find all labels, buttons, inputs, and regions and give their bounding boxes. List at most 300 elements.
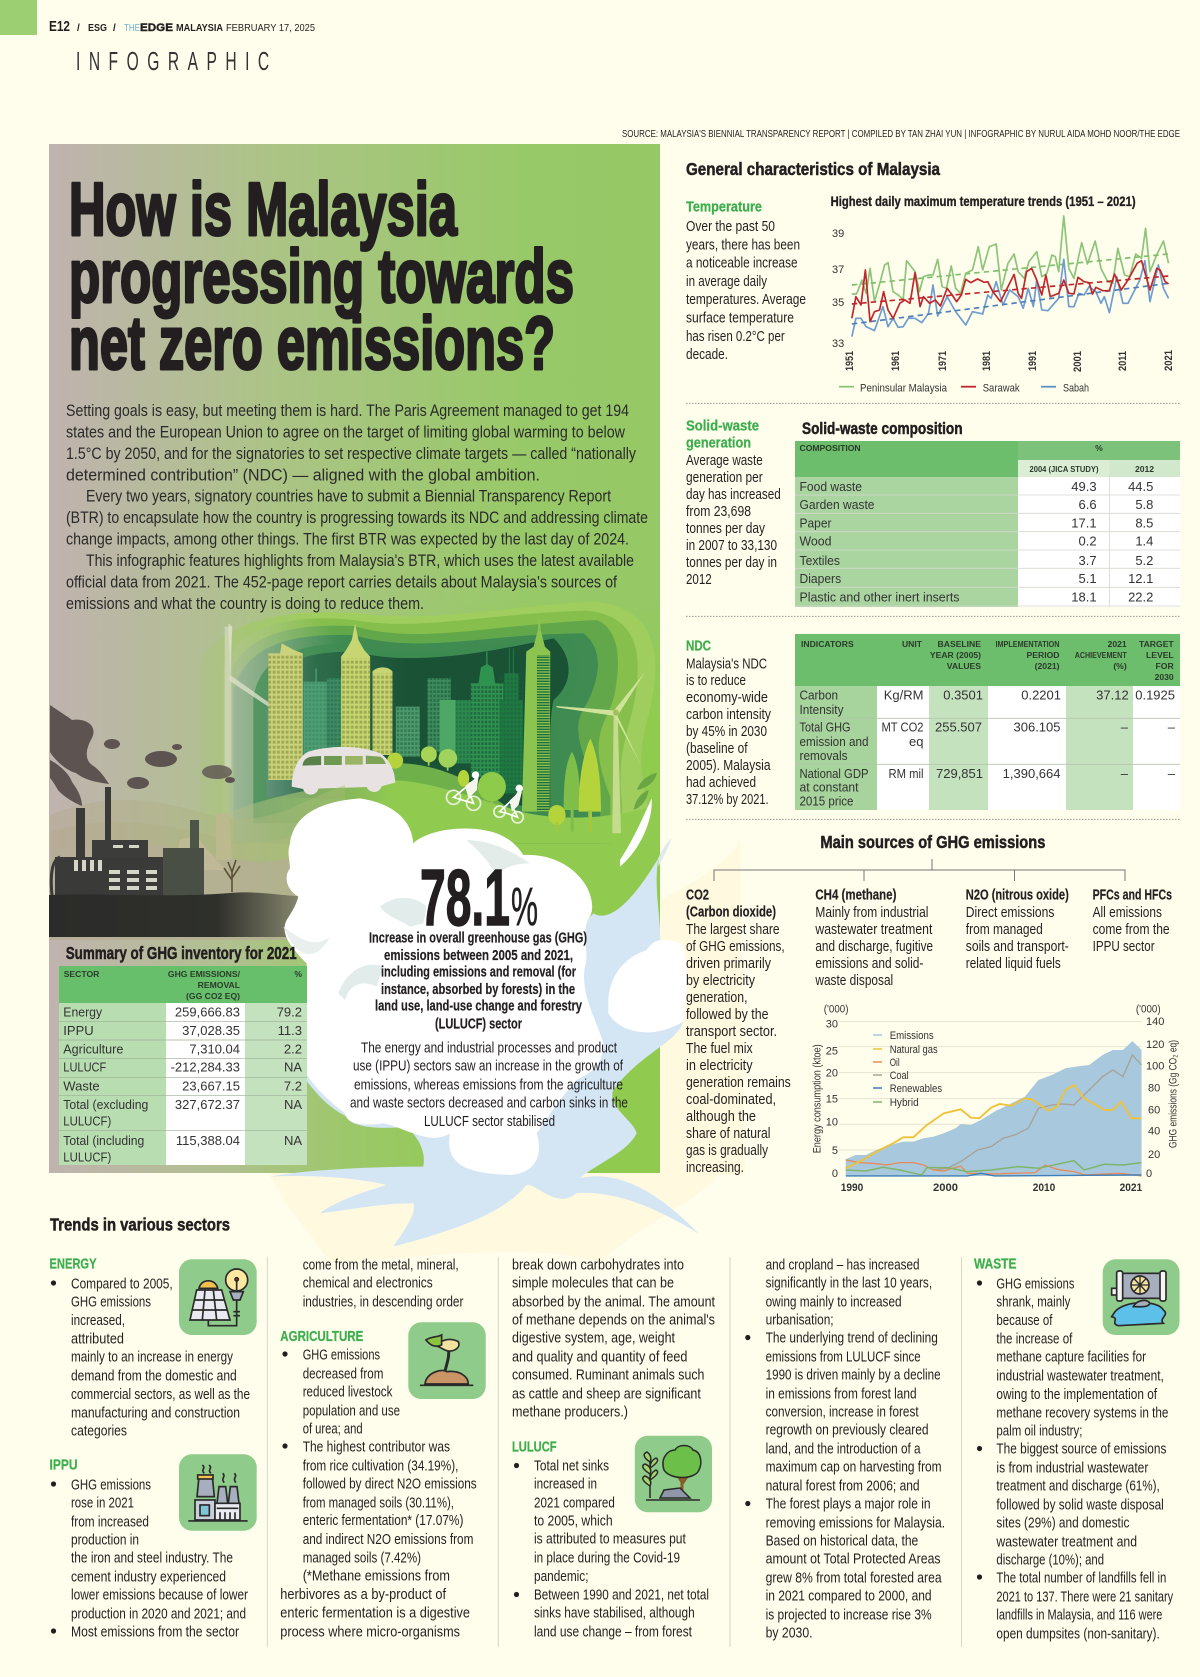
panel: main sources of GHG emissions [686,832,1179,1194]
table: summary of GHG inventory: NA [284,1133,302,1148]
chart legend: Emissions [890,1030,934,1042]
column 4 continuation text: grew 8% from total forested area [766,1570,942,1586]
intro text: Every two years, signatory countries have to submit a Biennial Transparency Report [86,487,611,506]
table: summary of GHG inventory: Total (including [63,1133,144,1148]
trees [387,738,601,833]
table: solid-waste composition: 2012 [1135,464,1154,474]
intro text: change impacts, among other things. The first BTR was expected by the last day of 2024. [66,530,629,549]
temperature text: temperatures. Average [686,292,806,308]
agriculture section: reduced livestock [303,1385,393,1401]
CH4 text: Mainly from industrial [815,905,928,921]
CO2 text: generation, [686,990,748,1006]
page number and masthead: E12 [49,19,70,35]
solid-waste text: Average waste [686,453,763,469]
bold description [369,931,587,1032]
ground hills [392,763,508,808]
table: NDC indicators [795,634,1180,810]
table: summary of GHG inventory: LULUCF [63,1060,106,1075]
green corner tab [0,0,37,35]
chart: energy consumption and emissions: ('000) [1136,1004,1161,1016]
energy section: demand from the domestic and [71,1368,237,1384]
bold description: (LULUCF) sector [435,1016,522,1032]
table: NDC indicators: Kg/RM [884,687,924,702]
PFCs and HFCs text [1093,887,1172,955]
chart legend: Coal [890,1070,909,1082]
table: NDC indicators: 2030 [1155,672,1174,682]
table: summary of GHG inventory: GHG EMISSIONS/ [168,969,241,979]
CO2 text: of GHG emissions, [686,939,785,955]
table: solid-waste composition: % [1095,443,1103,453]
IPPU section: production in [71,1533,139,1549]
N2O text: Direct emissions [966,905,1054,921]
section label: INFOGRAPHIC [76,47,269,76]
background buildings [303,648,523,793]
waste section: industrial wastewater treatment, [996,1368,1164,1384]
table: summary of GHG inventory: -212,284.33 [171,1060,240,1075]
IPPU section: IPPU [50,1458,78,1474]
LULUCF section: LULUCF [512,1439,557,1455]
NDC text: had achieved [686,775,756,791]
factory silhouette [51,787,240,897]
temperature text: a noticeable increase [686,256,798,272]
column 4 continuation text: in 2021 compared to 2000, and [766,1588,932,1604]
table: NDC indicators: IMPLEMENTATION [996,639,1060,649]
column 3 continuation text: absorbed by the animal. The amount [512,1294,715,1310]
column 4 continuation text: amount ot Total Protected Areas [766,1552,941,1568]
chart legend: Sabah [1063,383,1089,395]
bus [292,747,395,795]
chart legend: Oil [890,1057,900,1069]
solid-waste text: tonnes per day in [686,555,777,571]
table: summary of GHG inventory: IPPU [63,1023,94,1038]
waste section: WASTE [974,1256,1017,1272]
table: NDC indicators: 729,851 [936,766,983,781]
column 4 continuation text: significantly in the last 10 years, [766,1276,932,1292]
energy section: manufacturing and construction [71,1405,240,1421]
regular description: and waste sectors decreased and carbon sinks in the [350,1096,628,1112]
table: solid-waste composition [795,420,1180,607]
column 2 continuation text: come from the metal, mineral, [303,1258,459,1274]
tall light-green tower [522,618,550,812]
column 3 continuation text: methane producers.) [512,1404,628,1420]
chart: energy consumption and emissions: 10 [826,1117,838,1129]
connector tree [714,859,1125,881]
table: NDC indicators: 0.1925 [1135,687,1175,702]
callout: 78.1% statistic [350,853,628,1130]
column 4 continuation text: land, and the introduction of a [766,1441,921,1457]
table: summary of GHG inventory: 23,667.15 [182,1079,240,1094]
column 4 continuation text: removing emissions for Malaysia. [766,1516,945,1532]
agriculture section: herbivores as a by-product of [280,1587,447,1603]
paint splash: blue behind cloud [270,838,698,1247]
table: NDC indicators: – [1121,766,1129,781]
temperature text: years, there has been [686,238,800,254]
table: NDC indicators: VALUES [947,661,981,671]
line chart: temperature trends: 2011 [1117,351,1129,371]
right wind turbine [556,672,645,833]
solid-waste text: in 2007 to 33,130 [686,538,777,554]
CH4 text: CH4 (methane) [815,887,897,903]
chart legend [839,383,1089,395]
intro text: This infographic features highlights from Malaysia's BTR, which uses the latest available [86,551,634,570]
table: solid-waste composition: 6.6 [1079,497,1097,512]
table: summary of GHG inventory [59,943,307,1165]
panel: trends in various sectors [50,1215,1180,1647]
NDC text: NDC [686,639,711,655]
table: summary of GHG inventory: Total (excluding [63,1097,148,1112]
agriculture section: managed soils (7.42%) [303,1550,421,1566]
table: NDC indicators: 2021 [1108,639,1127,649]
illustration: green city and factory [49,602,664,940]
table: solid-waste composition: Diapers [800,571,842,586]
temperature text: in average daily [686,274,768,290]
agriculture section: enteric fermentation is a digestive [280,1606,470,1622]
column 3 continuation text: and quality and quantity of feed [512,1350,687,1366]
table: NDC indicators: TARGET [1139,639,1174,649]
column 4 continuation text: The underlying trend of declining [766,1331,938,1347]
title: net zero emissions? [69,301,555,385]
intro text: 1.5°C by 2050, and for the signatories to set respective climate targets — called “nationally [66,444,637,463]
waste section: open dumpsites (non-sanitary). [996,1626,1160,1642]
NDC text: by 45% in 2030 [686,724,767,740]
table: summary of GHG inventory: (GG CO2 EQ) [186,991,240,1001]
table: solid-waste composition: 8.5 [1135,516,1153,531]
chart: energy consumption and emissions: 2000 [933,1182,958,1194]
agriculture section: The highest contributor was [303,1440,450,1456]
paper-cut green layers [200,602,664,843]
column 4 continuation text: The forest plays a major role in [766,1497,931,1513]
page number and masthead: EDGE [140,22,173,34]
LULUCF section: to 2005, which [534,1514,613,1530]
table: solid-waste composition: 49.3 [1071,479,1097,494]
solid-waste text: from 23,698 [686,504,751,520]
column 2 continuation text: industries, in descending order [303,1294,464,1310]
CH4 text: and discharge, fugitive [815,939,933,955]
table: summary of GHG inventory: NA [284,1097,302,1112]
waste section: GHG emissions [996,1276,1074,1292]
table: summary of GHG inventory: 7.2 [284,1079,302,1094]
waste section: because of [996,1313,1053,1329]
chart: energy consumption and emissions: GHG emissions (Gg CO₂ eq) [1167,1040,1179,1148]
bold description: including emissions and removal (for [381,965,576,981]
chart legend: Hybrid [890,1097,919,1109]
line chart: temperature trends: Highest daily maximum temperature trends (1951 – 2021) [831,193,1136,209]
agriculture section: population and use [303,1404,400,1420]
LULUCF section: increased in [534,1477,597,1493]
table: NDC indicators: emission and [800,734,868,749]
solid-waste text: 2012 [686,572,712,588]
chart legend: Sarawak [983,383,1020,395]
agriculture section: of urea; and [303,1422,363,1438]
IPPU section: cement industry experienced [71,1569,226,1585]
CO2 text: increasing. [686,1160,744,1176]
chart legend: Peninsular Malaysia [860,383,948,395]
table: solid-waste composition: Garden waste [800,497,874,512]
intro text: determined contribution” (NDC) — aligned with the global ambition. [66,465,540,484]
column 4 continuation text [745,1258,945,1642]
line chart: temperature trends: 39 [832,228,844,240]
line chart: temperature trends: 2001 [1072,351,1084,372]
line chart: temperature trends [831,193,1175,395]
CO2 text [686,887,791,1176]
chart legend [873,1030,943,1109]
table: summary of GHG inventory: 7,310.04 [189,1041,240,1056]
agriculture section: from rice cultivation (34.19%), [303,1458,458,1474]
table: summary of GHG inventory: SECTOR [64,969,100,979]
icon: wastewater pipe [1103,1259,1180,1335]
table: NDC indicators: 1,390,664 [1003,766,1060,781]
page number and masthead: THE [124,22,140,34]
agriculture section: enteric fermentation* (17.07%) [303,1513,463,1529]
intro text: Setting goals is easy, but meeting them is hard. The Paris Agreement managed to get 194 [66,401,629,420]
dark ground [49,892,298,937]
regular description [350,1040,628,1130]
waste section: the increase of [996,1331,1073,1347]
table: NDC indicators: 255.507 [935,720,982,735]
line chart: temperature trends: 35 [832,297,844,309]
bold description: Increase in overall greenhouse gas (GHG) [369,931,587,947]
chart: energy consumption and emissions: 40 [1148,1126,1160,1138]
icon: factory [179,1454,257,1531]
table: solid-waste composition: Textiles [800,553,840,568]
waste section: palm oil industry; [996,1424,1082,1440]
chart legend: Natural gas [890,1044,938,1056]
chart: energy consumption and emissions: 60 [1148,1104,1160,1116]
header strip [0,0,315,76]
IPPU section: rose in 2021 [71,1495,134,1511]
table: NDC indicators: ACHIEVEMENT [1075,650,1127,660]
NDC text: carbon intensity [686,707,772,723]
solid-waste text: generation per [686,470,763,486]
table: summary of GHG inventory: Agriculture [63,1041,123,1056]
table: NDC indicators: UNIT [902,639,923,649]
table: solid-waste composition: COMPOSITION [800,443,861,453]
table: NDC indicators: – [1168,766,1176,781]
CO2 text: CO2 [686,887,709,903]
line chart: temperature trends: 1951 [844,351,856,371]
table: summary of GHG inventory: 2.2 [284,1041,302,1056]
table: summary of GHG inventory: Waste [63,1079,100,1094]
CH4 text: emissions and solid- [815,956,924,972]
waste section: methane capture facilities for [996,1350,1146,1366]
column 4 continuation text: by 2030. [766,1626,813,1642]
column 3 continuation text: consumed. Ruminant animals such [512,1368,704,1384]
table: summary of GHG inventory: LULUCF) [63,1150,111,1165]
IPPU section: the iron and steel industry. The [71,1550,233,1566]
chart: energy consumption and emissions: ('000) [824,1004,848,1016]
polluted wavy layers [50,785,350,940]
CH4 text [815,887,933,989]
table: NDC indicators: FOR [1156,661,1174,671]
PFCs and HFCs text: IPPU sector [1093,939,1155,955]
table: solid-waste composition: 1.4 [1135,534,1153,549]
table: NDC indicators: PERIOD [1027,650,1060,660]
agriculture section: (*Methane emissions from [303,1569,450,1585]
PFCs and HFCs text: All emissions [1093,905,1162,921]
line chart: temperature trends: 1971 [937,351,949,371]
CO2 text: gas is gradually [686,1143,769,1159]
left turbine [225,623,270,773]
chart: energy consumption and emissions: 2021 [1120,1182,1142,1194]
regular description: The energy and industrial processes and product [361,1040,617,1056]
table: NDC indicators: – [1168,720,1176,735]
CO2 text: transport sector. [686,1024,777,1040]
table: NDC indicators: RM mil [888,766,924,781]
column 3 continuation text: digestive system, age, weight [512,1331,675,1347]
IPPU section: GHG emissions [71,1478,151,1494]
table: solid-waste composition: 3.7 [1079,553,1097,568]
panel: general characteristics of Malaysia [686,159,1180,819]
table: summary of GHG inventory: 327,672.37 [175,1097,240,1112]
table: NDC indicators: 0.3501 [943,687,983,702]
panel: main gradient panel [49,144,660,1173]
NDC text: (baseline of [686,741,748,757]
column 4 continuation text: maximum cap on harvesting from [766,1460,942,1476]
regular description: emissions, whereas emissions from the agriculture [354,1077,623,1093]
CO2 text: share of natural [686,1126,770,1142]
page number and masthead: / [113,23,116,34]
page number and masthead: MALAYSIA [176,23,223,34]
LULUCF section: land use change – from forest [534,1624,692,1640]
CO2 text: The fuel mix [686,1041,753,1057]
chart: energy consumption and emissions: Energy consumption (ktoe) [811,1044,823,1153]
agriculture section: process where micro-organisms [280,1624,460,1640]
IPPU section: production in 2020 and 2021; and [71,1606,246,1622]
table: summary of GHG inventory: LULUCF) [63,1114,111,1129]
solid-waste text [686,419,781,588]
column 3 continuation text [512,1258,715,1420]
intro text: (BTR) to encapsulate how the country is progressing towards its NDC and addressing climate [66,508,648,527]
waste section: is from industrial wastewater [996,1460,1149,1476]
table: solid-waste composition: Paper [800,516,832,531]
CO2 text: generation remains [686,1075,791,1091]
bold description: instance, absorbed by forests) in the [381,982,575,998]
column 4 continuation text: is projected to increase rise 3% [766,1607,932,1623]
regular description: use (IPPU) sectors saw an increase in the growth of [353,1059,624,1075]
chart: energy consumption and emissions: 2010 [1033,1182,1055,1194]
PFCs and HFCs text: PFCs and HFCs [1093,887,1172,903]
chart: energy consumption and emissions: 15 [826,1094,838,1106]
CO2 text: driven primarily [686,956,772,972]
icon: forest [635,1436,712,1512]
title [69,167,574,385]
energy section [50,1256,257,1440]
table: NDC indicators: removals [800,748,848,763]
chart legend: Renewables [890,1083,943,1095]
page number and masthead: FEBRUARY 17, 2025 [226,22,315,34]
N2O text [966,887,1069,972]
chart: energy consumption and emissions: 30 [826,1018,838,1030]
agriculture section: from managed soils (30.11%), [303,1495,454,1511]
table: NDC indicators: – [1121,720,1129,735]
agriculture section: followed by direct N2O emissions [303,1476,477,1492]
CO2 text: by electricity [686,973,756,989]
column 4 continuation text: in emissions from forest land [766,1386,917,1402]
intro text [66,401,648,613]
table: NDC indicators: (2021) [1035,661,1060,671]
NDC text: economy-wide [686,690,768,706]
table: solid-waste composition: Plastic and other inert inserts [800,590,960,605]
table: summary of GHG inventory: REMOVAL [198,980,240,990]
line chart: temperature trends: 33 [832,338,844,350]
column 4 continuation text: and cropland – has increased [766,1258,920,1274]
table: NDC indicators: eq [909,734,924,749]
table: NDC indicators: Total GHG [800,720,850,735]
LULUCF section: sinks have stabilised, although [534,1606,695,1622]
N2O text: from managed [966,922,1043,938]
energy section: attributed [71,1331,124,1347]
agriculture section [280,1322,486,1640]
table: solid-waste composition: 12.1 [1128,571,1153,586]
waste section: discharge (10%); and [996,1552,1104,1568]
N2O text: related liquid fuels [966,956,1061,972]
waste section: treatment and discharge (61%), [996,1479,1160,1495]
pale paint splash on background [270,840,745,1262]
CO2 text: followed by the [686,1007,768,1023]
table: NDC indicators: 306.105 [1014,720,1060,735]
foreground pale buildings [268,623,392,780]
temperature text [686,200,806,363]
IPPU section [50,1454,257,1640]
chart: energy consumption and emissions: 25 [826,1046,838,1058]
white cloud [283,798,687,1175]
NDC text [686,639,772,808]
solid-waste text: Solid-waste [686,419,759,435]
line chart: temperature trends: 1991 [1027,351,1039,371]
table: solid-waste composition: 18.1 [1071,590,1097,605]
waste section: The biggest source of emissions [996,1442,1166,1458]
CO2 text: although the [686,1109,756,1125]
smoke plumes [50,705,235,806]
icon: seedling [408,1322,486,1399]
table: NDC indicators: 37.12 [1096,687,1129,702]
bold description: emissions between 2005 and 2021, [384,948,573,964]
table: solid-waste composition: Solid-waste composition [802,420,963,438]
CO2 text: The largest share [686,922,780,938]
table: NDC indicators: INDICATORS [801,639,854,649]
table: NDC indicators: YEAR (2005) [930,650,981,660]
column 4 continuation text: regrowth on previously cleared [766,1423,929,1439]
intro text: states and the European Union to agree on the target of limiting global warming to below [66,422,626,442]
icon: solar panel and bulb [179,1259,257,1335]
line chart: temperature trends: 1961 [890,351,902,371]
temperature text: decade. [686,347,728,363]
temperature text: surface temperature [686,310,794,326]
table: NDC indicators: (%) [1113,661,1127,671]
chart: energy consumption and emissions: 20 [826,1068,838,1080]
waste section: shrank, mainly [996,1295,1071,1311]
table: solid-waste composition: 22.2 [1128,590,1153,605]
energy section: Compared to 2005, [71,1276,173,1292]
LULUCF section: is attributed to measures put [534,1532,686,1548]
column 3 continuation text: as cattle and sheep are significant [512,1386,701,1402]
table: solid-waste composition: 5.8 [1135,497,1153,512]
table: solid-waste composition: 44.5 [1128,479,1153,494]
LULUCF section: pandemic; [534,1569,588,1585]
LULUCF section: 2021 compared [534,1495,615,1511]
table: NDC indicators: 0.2201 [1021,687,1061,702]
table: NDC indicators: MT CO2 [882,720,924,735]
table: summary of GHG inventory: 259,666.83 [175,1005,240,1020]
LULUCF section: in place during the Covid-19 [534,1550,680,1566]
column 4 continuation text: conversion, increase in forest [766,1404,919,1420]
table: NDC indicators: at constant [800,780,859,795]
energy section: ENERGY [50,1256,97,1272]
agriculture section: AGRICULTURE [280,1329,364,1345]
NDC text: Malaysia's NDC [686,656,767,672]
chart: energy consumption and emissions: 80 [1148,1082,1160,1094]
NDC text: is to reduce [686,673,746,689]
